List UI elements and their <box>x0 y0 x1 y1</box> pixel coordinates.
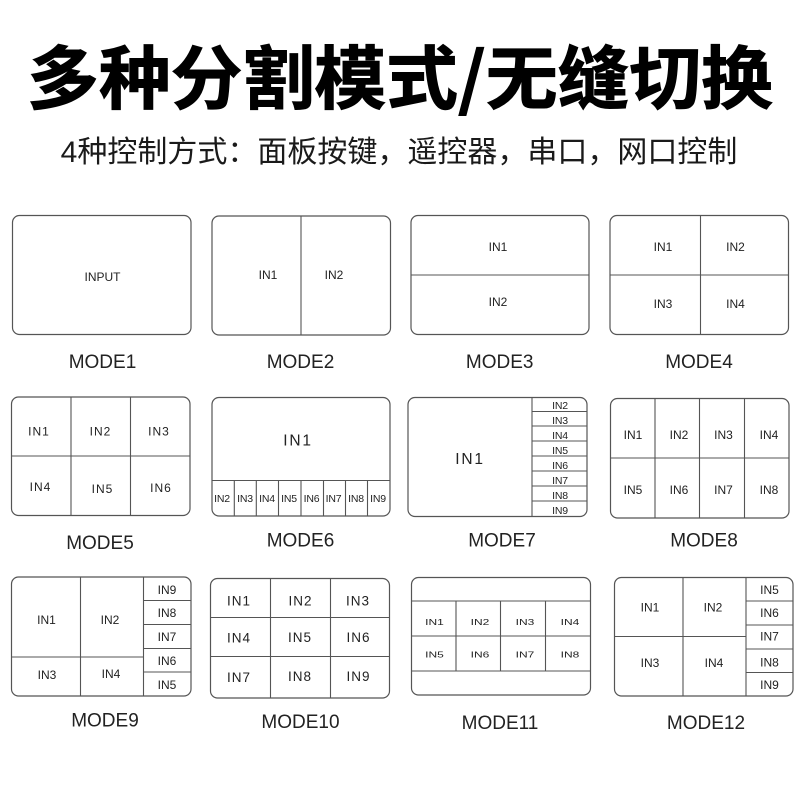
input labels: IN9 <box>760 678 779 692</box>
panel: mode 9 <box>12 577 191 732</box>
small input labels: IN2 <box>214 493 230 505</box>
input labels: IN3 <box>148 424 170 438</box>
small input labels: IN6 <box>552 460 568 472</box>
screen frame <box>12 577 191 696</box>
small input labels <box>214 493 386 505</box>
input labels: IN2 <box>670 428 689 442</box>
caption: mode 10: MODE10 <box>261 712 340 733</box>
input labels: IN9 <box>346 669 371 684</box>
small input labels: IN6 <box>304 493 320 505</box>
input labels: IN1 <box>489 240 508 254</box>
input labels: IN3 <box>516 619 535 627</box>
input labels: IN3 <box>654 297 673 311</box>
large input label: IN1 <box>455 451 485 468</box>
input labels: IN8 <box>760 483 779 497</box>
input labels: IN4 <box>227 630 251 646</box>
panel: mode 7 <box>408 398 587 552</box>
small input labels: IN4 <box>259 493 275 505</box>
input labels: IN2 <box>704 600 723 614</box>
screen frame <box>610 216 788 334</box>
small input labels: IN7 <box>326 493 342 505</box>
input labels: IN8 <box>760 656 779 670</box>
caption: mode 8: MODE8 <box>670 531 738 552</box>
panel: mode 10 <box>210 578 390 733</box>
small input labels: IN2 <box>552 400 568 412</box>
input labels: IN1 <box>227 594 251 608</box>
screen frame <box>610 398 789 518</box>
input labels: IN2 <box>726 240 745 254</box>
input labels: IN8 <box>158 606 177 620</box>
caption: mode 5: MODE5 <box>66 533 134 554</box>
caption: mode 1: MODE1 <box>69 352 136 373</box>
input label: INPUT <box>84 270 121 284</box>
dividers <box>532 398 587 516</box>
dividers <box>411 274 589 276</box>
small input labels: IN9 <box>552 505 568 517</box>
caption: mode 11: MODE11 <box>462 713 538 734</box>
input labels <box>641 583 779 692</box>
input labels: IN5 <box>288 630 312 645</box>
input labels <box>259 268 344 282</box>
input labels: IN1 <box>28 424 50 438</box>
input labels: IN2 <box>325 268 344 282</box>
caption: mode 12: MODE12 <box>667 713 745 734</box>
dividers <box>610 216 788 334</box>
input labels: IN6 <box>150 481 172 495</box>
screen frame <box>412 578 590 695</box>
dividers <box>212 480 390 516</box>
dividers <box>12 577 191 696</box>
small input labels: IN3 <box>552 415 568 427</box>
input labels: IN5 <box>760 583 779 597</box>
panel: mode 5 <box>12 397 190 554</box>
panel: mode 8 <box>610 398 789 552</box>
input labels: IN4 <box>760 428 779 442</box>
dividers <box>12 397 190 516</box>
input labels: IN6 <box>670 483 689 497</box>
input labels: IN1 <box>654 240 673 254</box>
panel: mode 4 <box>610 216 788 373</box>
input labels: IN1 <box>624 428 643 442</box>
screen frame <box>212 398 390 516</box>
input labels: IN5 <box>158 678 177 692</box>
small input labels: IN3 <box>237 493 253 505</box>
input labels: IN9 <box>158 583 177 597</box>
input labels: IN3 <box>714 428 733 442</box>
caption: mode 4: MODE4 <box>665 352 733 373</box>
input labels: IN7 <box>760 630 779 644</box>
input labels: IN6 <box>346 630 371 645</box>
screen frame <box>12 397 190 516</box>
subtitle: 4种控制方式：面板按键，遥控器，串口，网口控制 <box>61 136 737 169</box>
input labels: IN4 <box>726 297 745 311</box>
input labels: IN8 <box>561 651 580 660</box>
input labels: IN1 <box>641 600 660 614</box>
input labels: IN7 <box>516 651 535 660</box>
input labels: IN1 <box>425 619 444 627</box>
input labels: IN6 <box>760 606 779 620</box>
input labels: IN6 <box>158 654 177 668</box>
input labels: IN5 <box>624 483 643 497</box>
input labels: IN5 <box>92 482 113 496</box>
caption: mode 7: MODE7 <box>468 531 536 552</box>
input labels: IN7 <box>227 670 251 685</box>
panel: mode 12 <box>614 578 793 734</box>
caption: mode 2: MODE2 <box>267 352 334 373</box>
dividers <box>300 216 302 335</box>
caption: mode 6: MODE6 <box>267 531 334 552</box>
input labels: IN7 <box>158 630 177 644</box>
input labels: IN4 <box>102 667 121 681</box>
input labels: IN2 <box>101 613 120 627</box>
input labels <box>37 583 177 692</box>
input labels <box>28 424 172 496</box>
small input labels: IN9 <box>370 493 386 505</box>
screen frame <box>408 398 587 516</box>
input labels: IN6 <box>471 651 490 660</box>
input labels: IN2 <box>489 295 508 309</box>
input labels <box>489 240 508 309</box>
small input labels: IN4 <box>552 430 568 442</box>
input labels: IN4 <box>561 619 580 627</box>
input labels <box>425 619 580 660</box>
screen frame <box>411 216 589 334</box>
panel: mode 1 <box>12 216 191 373</box>
panel: mode 6 <box>212 398 390 552</box>
panel: mode 2 <box>212 216 390 373</box>
input labels: IN5 <box>425 651 444 660</box>
input labels: IN2 <box>90 424 111 438</box>
input labels <box>654 240 745 311</box>
input labels: IN3 <box>641 656 660 670</box>
screen frame <box>210 578 390 698</box>
input labels: IN2 <box>471 619 490 627</box>
input labels: IN3 <box>346 594 370 608</box>
input labels <box>227 594 371 685</box>
small input labels <box>552 400 568 517</box>
dividers <box>412 601 590 671</box>
panel: mode 3 <box>411 216 589 373</box>
input labels: IN4 <box>705 656 724 670</box>
input labels: IN2 <box>288 594 313 608</box>
panel: mode 11 <box>412 578 590 734</box>
input labels: IN4 <box>30 480 51 494</box>
large input label: IN1 <box>283 432 313 450</box>
small input labels: IN5 <box>552 445 568 457</box>
input labels: IN8 <box>288 669 312 684</box>
title: 多种分割模式/无缝切换 <box>27 23 773 123</box>
small input labels: IN5 <box>281 493 297 505</box>
screen frame <box>614 578 793 696</box>
input labels: IN3 <box>38 668 57 682</box>
input labels: IN1 <box>37 613 56 627</box>
screen frame <box>12 216 191 334</box>
small input labels: IN8 <box>348 493 364 505</box>
dividers <box>610 398 789 518</box>
screen frame <box>212 216 390 335</box>
input labels <box>624 428 779 497</box>
caption: mode 3: MODE3 <box>466 352 533 373</box>
dividers <box>210 578 390 698</box>
dividers <box>614 578 793 696</box>
input labels: IN7 <box>714 483 733 497</box>
input labels: IN1 <box>259 268 278 282</box>
caption: mode 9: MODE9 <box>71 711 139 732</box>
small input labels: IN7 <box>552 475 568 487</box>
small input labels: IN8 <box>552 490 568 502</box>
